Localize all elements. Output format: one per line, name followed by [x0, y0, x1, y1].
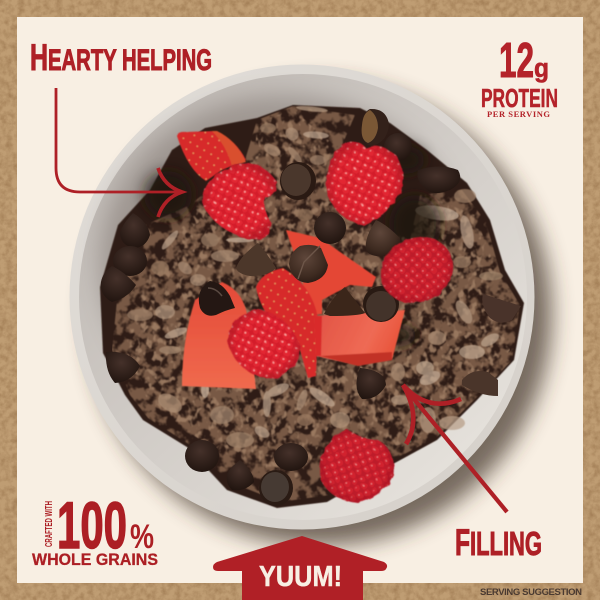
centre strawberry [256, 268, 318, 378]
raspberry 3 [370, 225, 464, 315]
heading: hearty helping: HEARTY HELPING [30, 37, 212, 78]
badge: yuum arrow: YUUM! [259, 561, 342, 593]
dark gaps [144, 146, 441, 347]
arrow: filling [403, 385, 507, 512]
raspberry 1 [326, 142, 403, 226]
callout: 100% whole grains: % [130, 518, 154, 556]
raspberry 5 [320, 429, 394, 503]
heading: filling: FILLING [455, 522, 542, 563]
raspberry 2 [203, 163, 277, 240]
bowl rim [70, 64, 534, 530]
callout: 100% whole grains [32, 488, 158, 569]
pyramid chip [236, 243, 276, 276]
bowl inner wall [79, 74, 527, 520]
callout: 100% whole grains: CRAFTED WITH [44, 501, 55, 547]
footnote: serving suggestion: SERVING SUGGESTION [480, 587, 582, 598]
arrow: hearty helping [56, 88, 182, 217]
callout: 12g protein: g [534, 53, 549, 83]
food base [100, 105, 524, 508]
bowl photo [70, 64, 534, 530]
right slice [314, 310, 405, 365]
brown side chip [362, 109, 389, 146]
top-left strawberry [177, 131, 246, 181]
raspberries [203, 142, 464, 503]
strawberry slices [177, 131, 405, 389]
left slice [182, 282, 256, 389]
bowl shadow [88, 82, 552, 546]
inner wall shadow [100, 95, 470, 435]
oat texture [112, 106, 520, 502]
teardrop chip on slice [199, 281, 235, 316]
callout: 12g protein: PROTEIN [481, 83, 558, 113]
callout: 12g protein [481, 34, 558, 119]
callout: 100% whole grains: 100 [57, 488, 127, 562]
chocolate chips [101, 109, 521, 506]
callout: 100% whole grains: WHOLE GRAINS [32, 551, 158, 569]
raspberry 4 [228, 309, 300, 379]
callout: 12g protein: 12 [499, 34, 534, 88]
centre-right slice [286, 230, 376, 315]
oat flakes [127, 105, 503, 448]
callout: 12g protein: PER SERVING [487, 109, 550, 119]
badge: yuum arrow [213, 536, 387, 600]
